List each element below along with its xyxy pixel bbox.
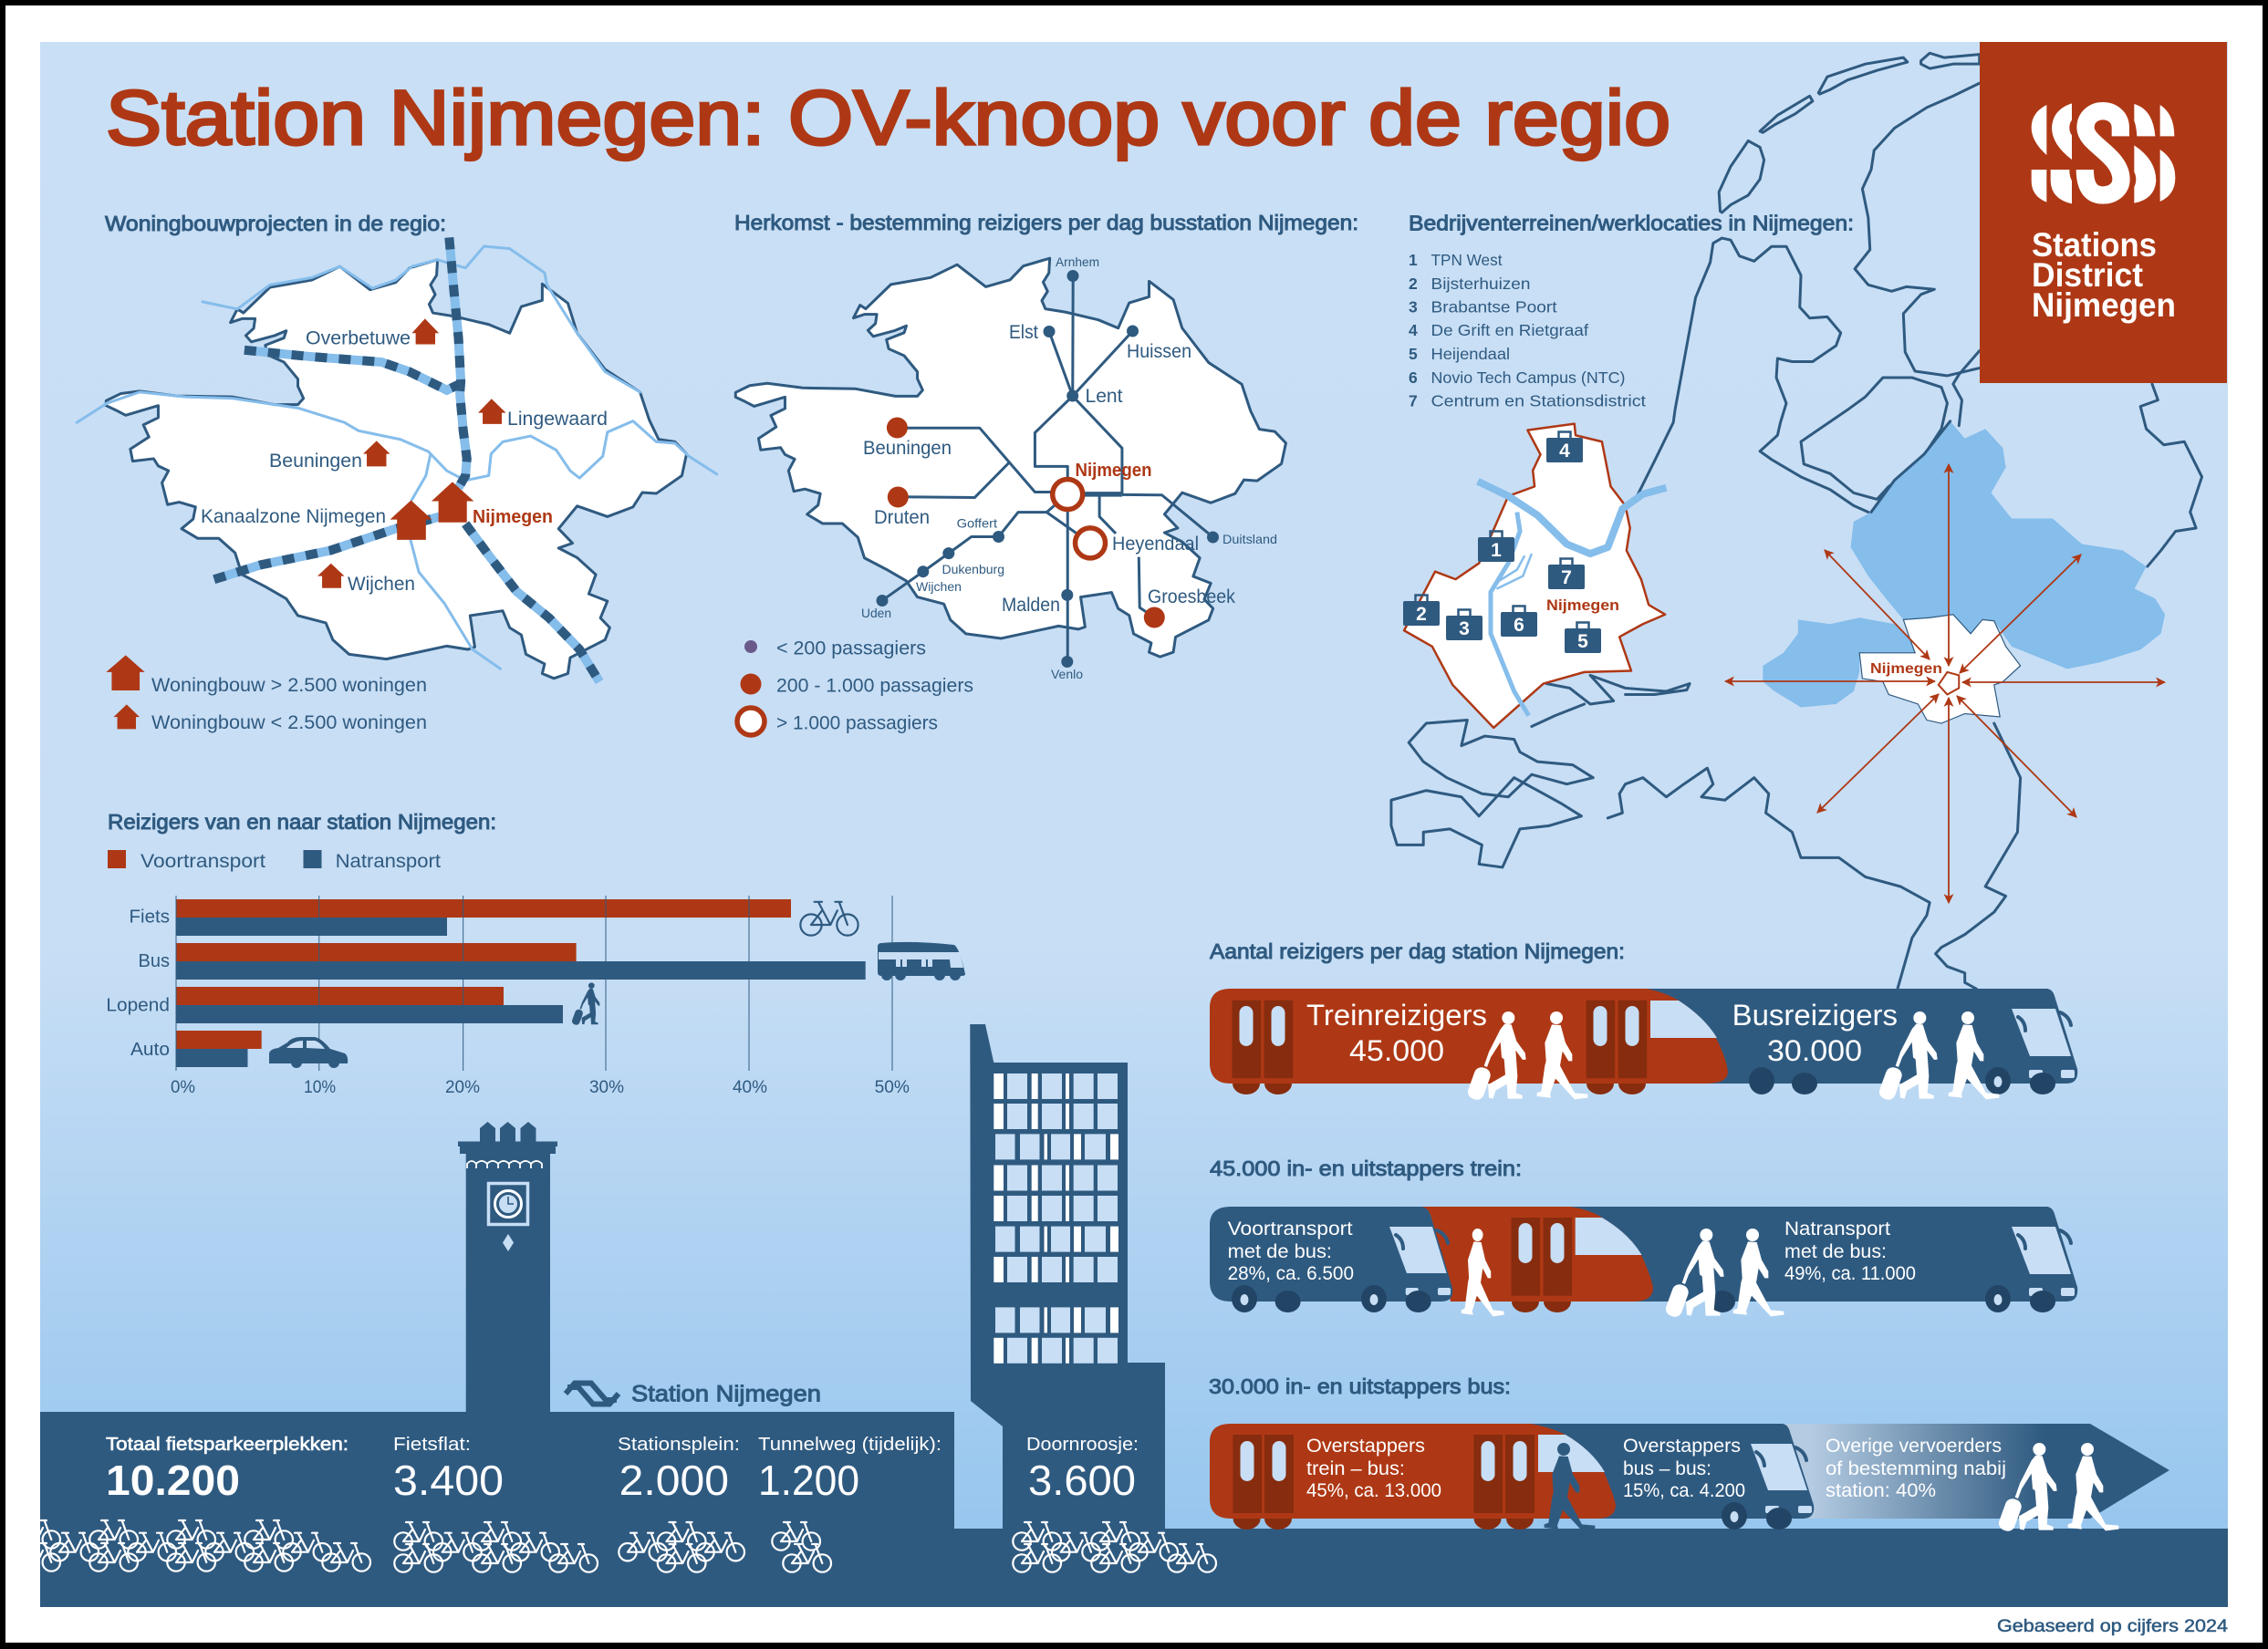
stop labels: Goffert — [957, 516, 997, 531]
bar chart: Fiets — [130, 907, 170, 928]
heading: Herkomst - bestemming: Herkomst - bestemming reizigers per dag busstation Nijmegen: — [734, 211, 1358, 234]
label: Nijmegen on NL map: Nijmegen — [1870, 661, 1942, 677]
bar chart: Lopend — [106, 996, 170, 1016]
text: overstappers trein-bus — [1306, 1436, 1441, 1501]
label: Station Nijmegen: Station Nijmegen — [631, 1382, 821, 1407]
text: voortransport met de bus: Voortransport — [1228, 1219, 1353, 1239]
list of locations: 3 — [1409, 297, 1418, 316]
title: Station Nijmegen: OV-knoop voor de regio — [106, 75, 1670, 161]
text: Treinreizigers 45.000: Treinreizigers — [1306, 999, 1487, 1032]
stop labels: Heyendaal — [1112, 534, 1199, 555]
list of locations: 4 — [1409, 321, 1418, 339]
stat: Stationsplein — [618, 1435, 740, 1504]
stat: Fietsflat: 3.400 — [393, 1457, 504, 1504]
stop labels: Nijmegen — [1075, 461, 1151, 481]
icons: numbered briefcases: 5 — [1577, 631, 1588, 652]
panel: bicycle parking figures — [12, 1435, 1216, 1572]
legend: passenger counts: 200 - 1.000 passagiers — [776, 675, 973, 697]
bus: navy vehicle — [1524, 1424, 1814, 1530]
stop labels: Elst — [1009, 322, 1038, 343]
list of locations: Brabantse Poort — [1431, 297, 1557, 316]
bar chart: 30% — [589, 1078, 624, 1097]
logo block: Stations District Nijmegen: Nijmegen — [2032, 286, 2176, 324]
stat: total bike parking — [106, 1435, 349, 1504]
icons: numbered briefcases: 2 — [1416, 604, 1427, 625]
panel: housing projects map — [77, 212, 717, 733]
legend: voor/natransport: Voortransport — [140, 851, 265, 872]
panel: travellers bar chart — [106, 810, 965, 1097]
stop labels: Wijchen — [916, 579, 962, 594]
legend: passenger counts: > 1.000 passagiers — [776, 713, 938, 733]
bicycles: Doornroosje — [1013, 1522, 1216, 1572]
text: voortransport met de bus: met de bus: — [1228, 1241, 1332, 1262]
icons: numbered briefcases: 1 — [1491, 540, 1502, 561]
text: natransport met de bus: met de bus: — [1784, 1241, 1887, 1262]
stat: Stationsplein: 2.000 — [619, 1457, 729, 1504]
legend: passenger counts: < 200 passagiers — [776, 638, 926, 659]
stat: total bike parking: Totaal fietsparkeerplekken: — [106, 1435, 349, 1455]
arrow: other operators — [1779, 1424, 2169, 1519]
bar chart: Bus — [139, 951, 170, 971]
map: region outline — [735, 258, 1285, 657]
list of locations: 1 — [1409, 251, 1418, 269]
logo block: Stations District Nijmegen — [1980, 42, 2227, 383]
text: natransport met de bus: Natransport — [1784, 1219, 1890, 1239]
logo block: Stations District Nijmegen: District — [2032, 256, 2143, 294]
train: red vehicle — [1210, 989, 1728, 1094]
map labels: municipalities — [201, 328, 608, 595]
heading: Reizigers van en naar: Reizigers van en naar station Nijmegen: — [108, 810, 496, 834]
text: overige vervoerders: station: 40% — [1826, 1480, 1936, 1501]
list of locations: Heijendaal — [1431, 345, 1510, 363]
map: Nijmegen municipality with rivers — [1404, 424, 1666, 728]
map labels: municipalities: Overbetuwe — [306, 328, 411, 348]
bar chart — [106, 896, 910, 1097]
legend: housing sizes — [151, 675, 427, 733]
bus: natransport — [1569, 1207, 2077, 1312]
bar chart: 0% — [171, 1078, 195, 1097]
list of locations: Novio Tech Campus (NTC) — [1431, 368, 1626, 387]
arrows radiating from Nijmegen — [1725, 464, 2165, 903]
panel: bus in- and outgoing — [1209, 1374, 2169, 1533]
stop labels: Groesbeek — [1148, 586, 1235, 607]
text: natransport met de bus — [1784, 1219, 1916, 1284]
icon: walker — [571, 982, 600, 1026]
people walking — [1462, 1229, 1784, 1319]
stop labels — [861, 254, 1277, 681]
text: Busreizigers 30.000: 30.000 — [1767, 1034, 1862, 1067]
map: region outline, rivers and roads — [77, 237, 717, 682]
map labels: municipalities: Nijmegen — [473, 507, 553, 527]
stat: Stationsplein: Stationsplein: — [618, 1435, 740, 1455]
text: overstappers bus-bus — [1623, 1436, 1745, 1501]
label: Nijmegen: Nijmegen — [1546, 596, 1619, 614]
heading: Woningbouwprojecten: Woningbouwprojecten in de regio: — [105, 212, 446, 235]
stops: red dots and rings — [887, 418, 1165, 627]
bus: navy vehicle — [1597, 989, 2077, 1094]
legend: passenger counts — [737, 638, 973, 735]
stat: Doornroosje: Doornroosje: — [1026, 1435, 1139, 1455]
text: Treinreizigers 45.000: 45.000 — [1349, 1034, 1444, 1067]
text: Busreizigers 30.000: Busreizigers — [1732, 999, 1898, 1032]
legend: housing sizes: Woningbouw > 2.500 woningen — [151, 675, 427, 696]
text: voortransport met de bus — [1228, 1219, 1354, 1284]
list of locations: 7 — [1409, 392, 1418, 410]
stat: Fietsflat — [393, 1435, 504, 1504]
bar chart: 20% — [445, 1078, 480, 1097]
bicycles: Stationsplein — [619, 1522, 744, 1572]
stops: navy dots — [876, 270, 1219, 668]
list of locations — [1409, 251, 1646, 410]
list of locations: 5 — [1409, 345, 1418, 363]
bus lines network — [882, 275, 1213, 662]
person: navy walker — [1545, 1443, 1595, 1530]
bus: voortransport — [1210, 1207, 1452, 1312]
heading: Bedrijventerreinen: Bedrijventerreinen/werklocaties in Nijmegen: — [1409, 212, 1854, 235]
stop labels: Lent — [1086, 386, 1123, 407]
bar chart: 40% — [733, 1078, 767, 1097]
list of locations: Centrum en Stationsdistrict — [1431, 392, 1646, 410]
logo: NS arrows — [566, 1383, 619, 1405]
stop labels: Arnhem — [1056, 254, 1099, 269]
stop labels: Duitsland — [1222, 532, 1277, 546]
text: Busreizigers 30.000 — [1732, 999, 1898, 1067]
icon: car — [269, 1037, 348, 1068]
icons: numbered briefcases: 4 — [1559, 441, 1570, 462]
stat: Doornroosje: 3.600 — [1028, 1457, 1136, 1504]
text: overstappers bus-bus: 15%, ca. 4.200 — [1623, 1480, 1745, 1501]
icons: numbered briefcases: 3 — [1459, 618, 1470, 639]
icon: bicycle — [800, 902, 858, 936]
stat: Tunnelweg: 1.200 — [758, 1457, 859, 1504]
legend: housing sizes: Woningbouw < 2.500 woningen — [151, 712, 427, 733]
stat: Fietsflat: Fietsflat: — [393, 1435, 471, 1455]
windows — [994, 1073, 1118, 1364]
bar chart: 50% — [875, 1078, 910, 1097]
list of locations: TPN West — [1431, 251, 1503, 269]
train: red vehicle — [1420, 1207, 1653, 1312]
text: overige vervoerders — [1826, 1436, 2006, 1501]
station building with clock tower — [40, 1122, 954, 1530]
panel: travellers per day — [1210, 939, 2077, 1102]
train: red vehicle — [1210, 1424, 1616, 1530]
icons: numbered briefcases: 7 — [1561, 567, 1572, 588]
people walking — [1997, 1443, 2118, 1533]
stat: Doornroosje — [1026, 1435, 1139, 1504]
logo block: Stations District Nijmegen: Stations — [2032, 226, 2157, 264]
stop labels: Druten — [874, 507, 930, 528]
heading: 30.000 in- en uitstappers bus: 30.000 in- en uitstappers bus: — [1209, 1374, 1511, 1398]
stat: Tunnelweg — [758, 1435, 942, 1504]
stop labels: Venlo — [1051, 667, 1083, 681]
list of locations: De Grift en Rietgraaf — [1431, 321, 1588, 339]
bar chart: 10% — [304, 1078, 336, 1097]
ground band — [40, 1529, 2228, 1607]
text: natransport met de bus: 49%, ca. 11.000 — [1784, 1263, 1916, 1284]
text: overstappers bus-bus: Overstappers — [1623, 1436, 1741, 1457]
tall building — [970, 1024, 1165, 1530]
stop labels: Beuningen — [863, 438, 952, 459]
bicycles: total — [12, 1520, 370, 1571]
heading: Aantal reizigers: Aantal reizigers per dag station Nijmegen: — [1210, 939, 1625, 963]
bar chart: Auto — [130, 1040, 170, 1060]
map labels: municipalities: Kanaalzone Nijmegen — [201, 506, 386, 527]
legend: voor/natransport: Natransport — [336, 851, 441, 872]
list of locations: 2 — [1409, 275, 1418, 293]
text: overige vervoerders: Overige vervoerders — [1826, 1436, 2002, 1457]
icons: houses on map and legend — [106, 318, 506, 729]
stop labels: Malden — [1002, 595, 1060, 616]
map labels: municipalities: Wijchen — [348, 574, 415, 595]
stop labels: Dukenburg — [942, 562, 1004, 576]
list of locations: 6 — [1409, 368, 1418, 387]
list of locations: Bijsterhuizen — [1431, 275, 1531, 293]
bicycles: Fietsflat — [394, 1522, 598, 1572]
map: Gelderland and Nijmegen catchment — [1763, 421, 2165, 723]
map: outline of the Netherlands — [1391, 53, 2202, 989]
people walking — [1466, 1011, 1999, 1102]
icons: numbered briefcases: 6 — [1514, 615, 1524, 636]
bicycles: Tunnelweg — [772, 1522, 831, 1572]
text: voortransport met de bus: 28%, ca. 6.500 — [1228, 1263, 1354, 1284]
text: overstappers trein-bus: 45%, ca. 13.000 — [1306, 1480, 1441, 1501]
text: overige vervoerders: of bestemming nabij — [1826, 1458, 2006, 1479]
text: Treinreizigers 45.000 — [1306, 999, 1487, 1067]
panel: business parks — [1403, 212, 1854, 728]
stop labels: Huissen — [1127, 341, 1191, 362]
text: overstappers trein-bus: Overstappers — [1306, 1436, 1425, 1457]
panel: train in- and outgoing — [1210, 1156, 2077, 1319]
icon: bus — [878, 942, 965, 980]
stat: total bike parking: 10.200 — [106, 1457, 240, 1504]
text: overstappers trein-bus: trein – bus: — [1306, 1458, 1405, 1479]
stat: Tunnelweg: Tunnelweg (tijdelijk): — [758, 1435, 942, 1455]
footer source note: Gebaseerd op cijfers 2024 — [1997, 1617, 2228, 1636]
map labels: municipalities: Beuningen — [269, 451, 362, 472]
panel: bus passengers map — [734, 211, 1358, 735]
map labels: municipalities: Lingewaard — [507, 409, 608, 430]
icons: numbered briefcases — [1403, 432, 1601, 653]
stop labels: Uden — [861, 606, 891, 620]
legend: voor/natransport — [108, 850, 441, 872]
text: overstappers bus-bus: bus – bus: — [1623, 1458, 1711, 1479]
heading: 45.000 in- en uitstappers trein: 45.000 in- en uitstappers trein: — [1210, 1156, 1522, 1180]
